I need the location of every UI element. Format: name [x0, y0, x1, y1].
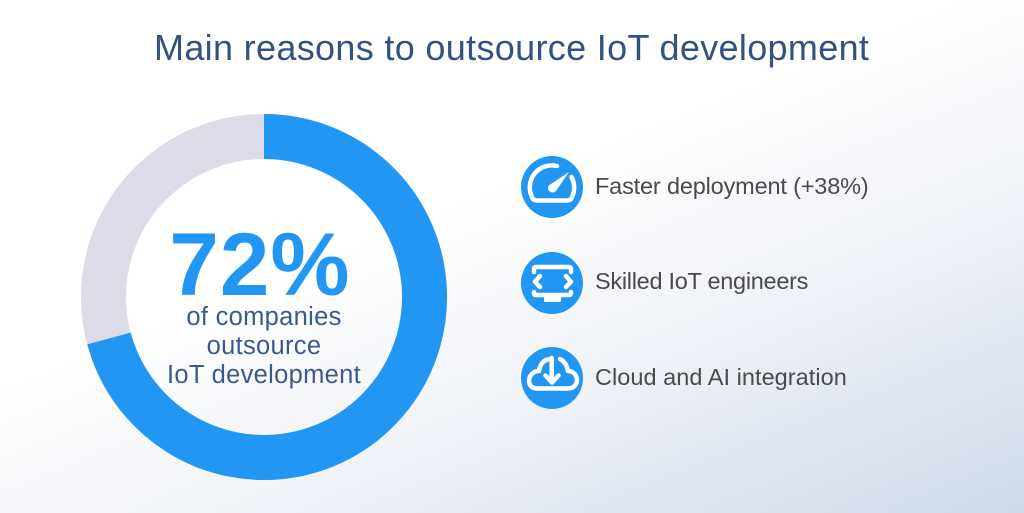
title: Main reasons to outsource IoT development	[154, 27, 869, 68]
icon: cloud download	[521, 347, 583, 409]
reason 2	[521, 252, 808, 314]
reason 3	[521, 347, 847, 409]
icon: code screen	[521, 252, 583, 314]
reason 1	[521, 156, 868, 218]
label: Cloud and AI integration	[595, 364, 847, 390]
icon: speedometer	[521, 156, 583, 218]
description: IoT development	[167, 361, 361, 389]
description: of companies	[186, 303, 342, 331]
description	[167, 303, 361, 389]
description: outsource	[207, 332, 321, 360]
big percentage: 72%	[169, 214, 351, 314]
label: Faster deployment (+38%)	[595, 173, 868, 199]
donut centre label	[167, 214, 361, 389]
label: Skilled IoT engineers	[595, 268, 808, 294]
